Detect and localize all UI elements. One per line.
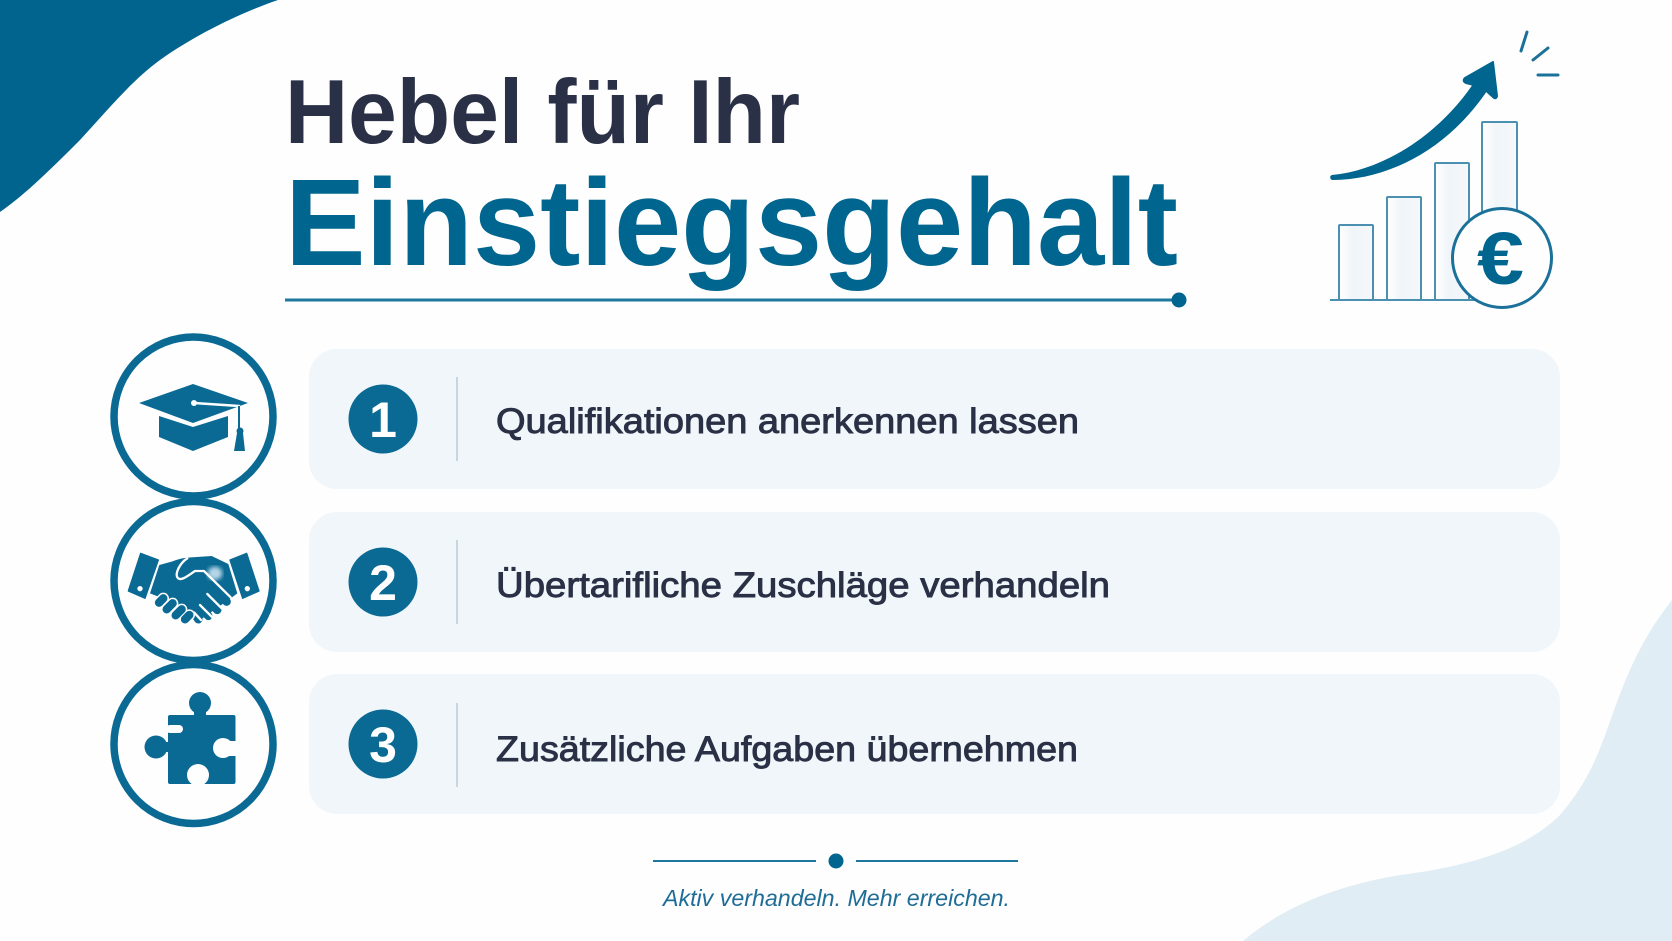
card background [309, 674, 1560, 814]
step text: Zusätzliche Aufgaben übernehmen [496, 730, 1078, 769]
handshake [128, 553, 259, 620]
icon: graduation cap in ring [114, 337, 273, 496]
title [285, 62, 1186, 308]
panel: step 1 [309, 349, 1560, 489]
corner wave: top left [0, 0, 278, 212]
separator [456, 703, 458, 787]
icon: puzzle piece in ring [114, 664, 273, 824]
number badge 2 [348, 548, 418, 616]
number badge 1: 1 [369, 392, 397, 448]
number badge 1 [348, 384, 418, 454]
footer tagline: Aktiv verhandeln. Mehr erreichen. [661, 885, 1010, 911]
chart baseline [1330, 299, 1480, 301]
puzzle piece [144, 692, 238, 786]
title line 2: Einstiegsgehalt [285, 155, 1178, 292]
separator [456, 540, 458, 624]
number badge 3: 3 [369, 717, 397, 773]
footer divider [653, 854, 1018, 868]
title underline [285, 292, 1186, 308]
cap [139, 384, 248, 451]
card background [309, 512, 1560, 652]
step text: Übertarifliche Zuschläge verhandeln [496, 566, 1110, 605]
card background [309, 349, 1560, 489]
number badge 2: 2 [369, 555, 397, 611]
euro coin [1452, 208, 1552, 308]
chart bars [1339, 122, 1517, 300]
spark lines [1521, 32, 1558, 75]
panel: step 3 [309, 674, 1560, 814]
corner wave: bottom right [1243, 600, 1672, 941]
title line 1: Hebel für Ihr [285, 62, 800, 163]
step text: Qualifikationen anerkennen lassen [496, 402, 1079, 441]
icon: rising bar chart with euro coin [1330, 32, 1558, 308]
number badge 3 [348, 710, 418, 778]
euro coin: € [1477, 217, 1524, 300]
icon: handshake in ring [114, 502, 273, 660]
growth arrow [1330, 62, 1497, 180]
separator [456, 377, 458, 461]
panel: step 2 [309, 512, 1560, 652]
